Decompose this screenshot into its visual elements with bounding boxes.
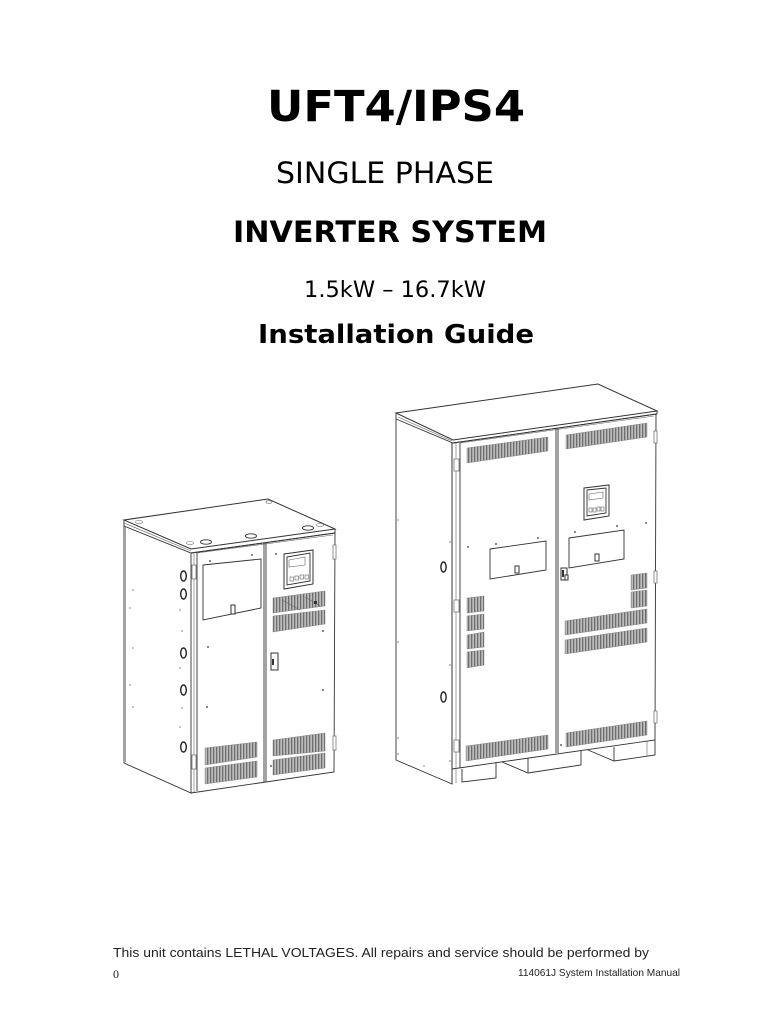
right door cover plate	[569, 522, 647, 568]
title: UFT4/IPS4	[267, 82, 525, 132]
document reference: 114061J System Installation Manual	[518, 967, 680, 979]
page number: 0	[113, 967, 119, 981]
power range: 1.5kW – 16.7kW	[304, 278, 486, 303]
bottom vents	[466, 721, 647, 761]
top vents	[467, 423, 647, 463]
door fasteners	[560, 744, 562, 746]
heading: installation guide: Installation Guide	[258, 320, 534, 350]
cabinet front frame	[191, 533, 336, 793]
illustration: small cabinet	[124, 499, 336, 793]
illustration: large cabinet	[396, 384, 657, 784]
left door cover plate	[203, 554, 261, 708]
control panel	[284, 550, 313, 589]
subtitle: single phase: SINGLE PHASE	[276, 156, 494, 190]
plinth feet	[462, 740, 655, 782]
lower right vents	[273, 733, 325, 775]
cabinet side panel	[396, 419, 452, 784]
cabinet side panel	[124, 526, 191, 793]
door handle	[271, 653, 278, 670]
right door side vents	[631, 573, 647, 608]
left door side vents	[467, 596, 484, 668]
lower left vents	[205, 742, 257, 784]
heading: inverter system: INVERTER SYSTEM	[233, 215, 547, 249]
door handle	[561, 568, 568, 580]
safety warning text: This unit contains LETHAL VOLTAGES. All repairs and service should be performed by	[113, 945, 649, 960]
left door cover plate	[467, 537, 546, 579]
cabinet top	[396, 384, 657, 443]
middle right vents	[565, 609, 647, 654]
control panel	[584, 485, 609, 520]
cabinet top	[124, 499, 335, 553]
upper right vents	[273, 591, 325, 632]
door fasteners	[270, 553, 324, 767]
cabinet front frame	[452, 414, 657, 784]
